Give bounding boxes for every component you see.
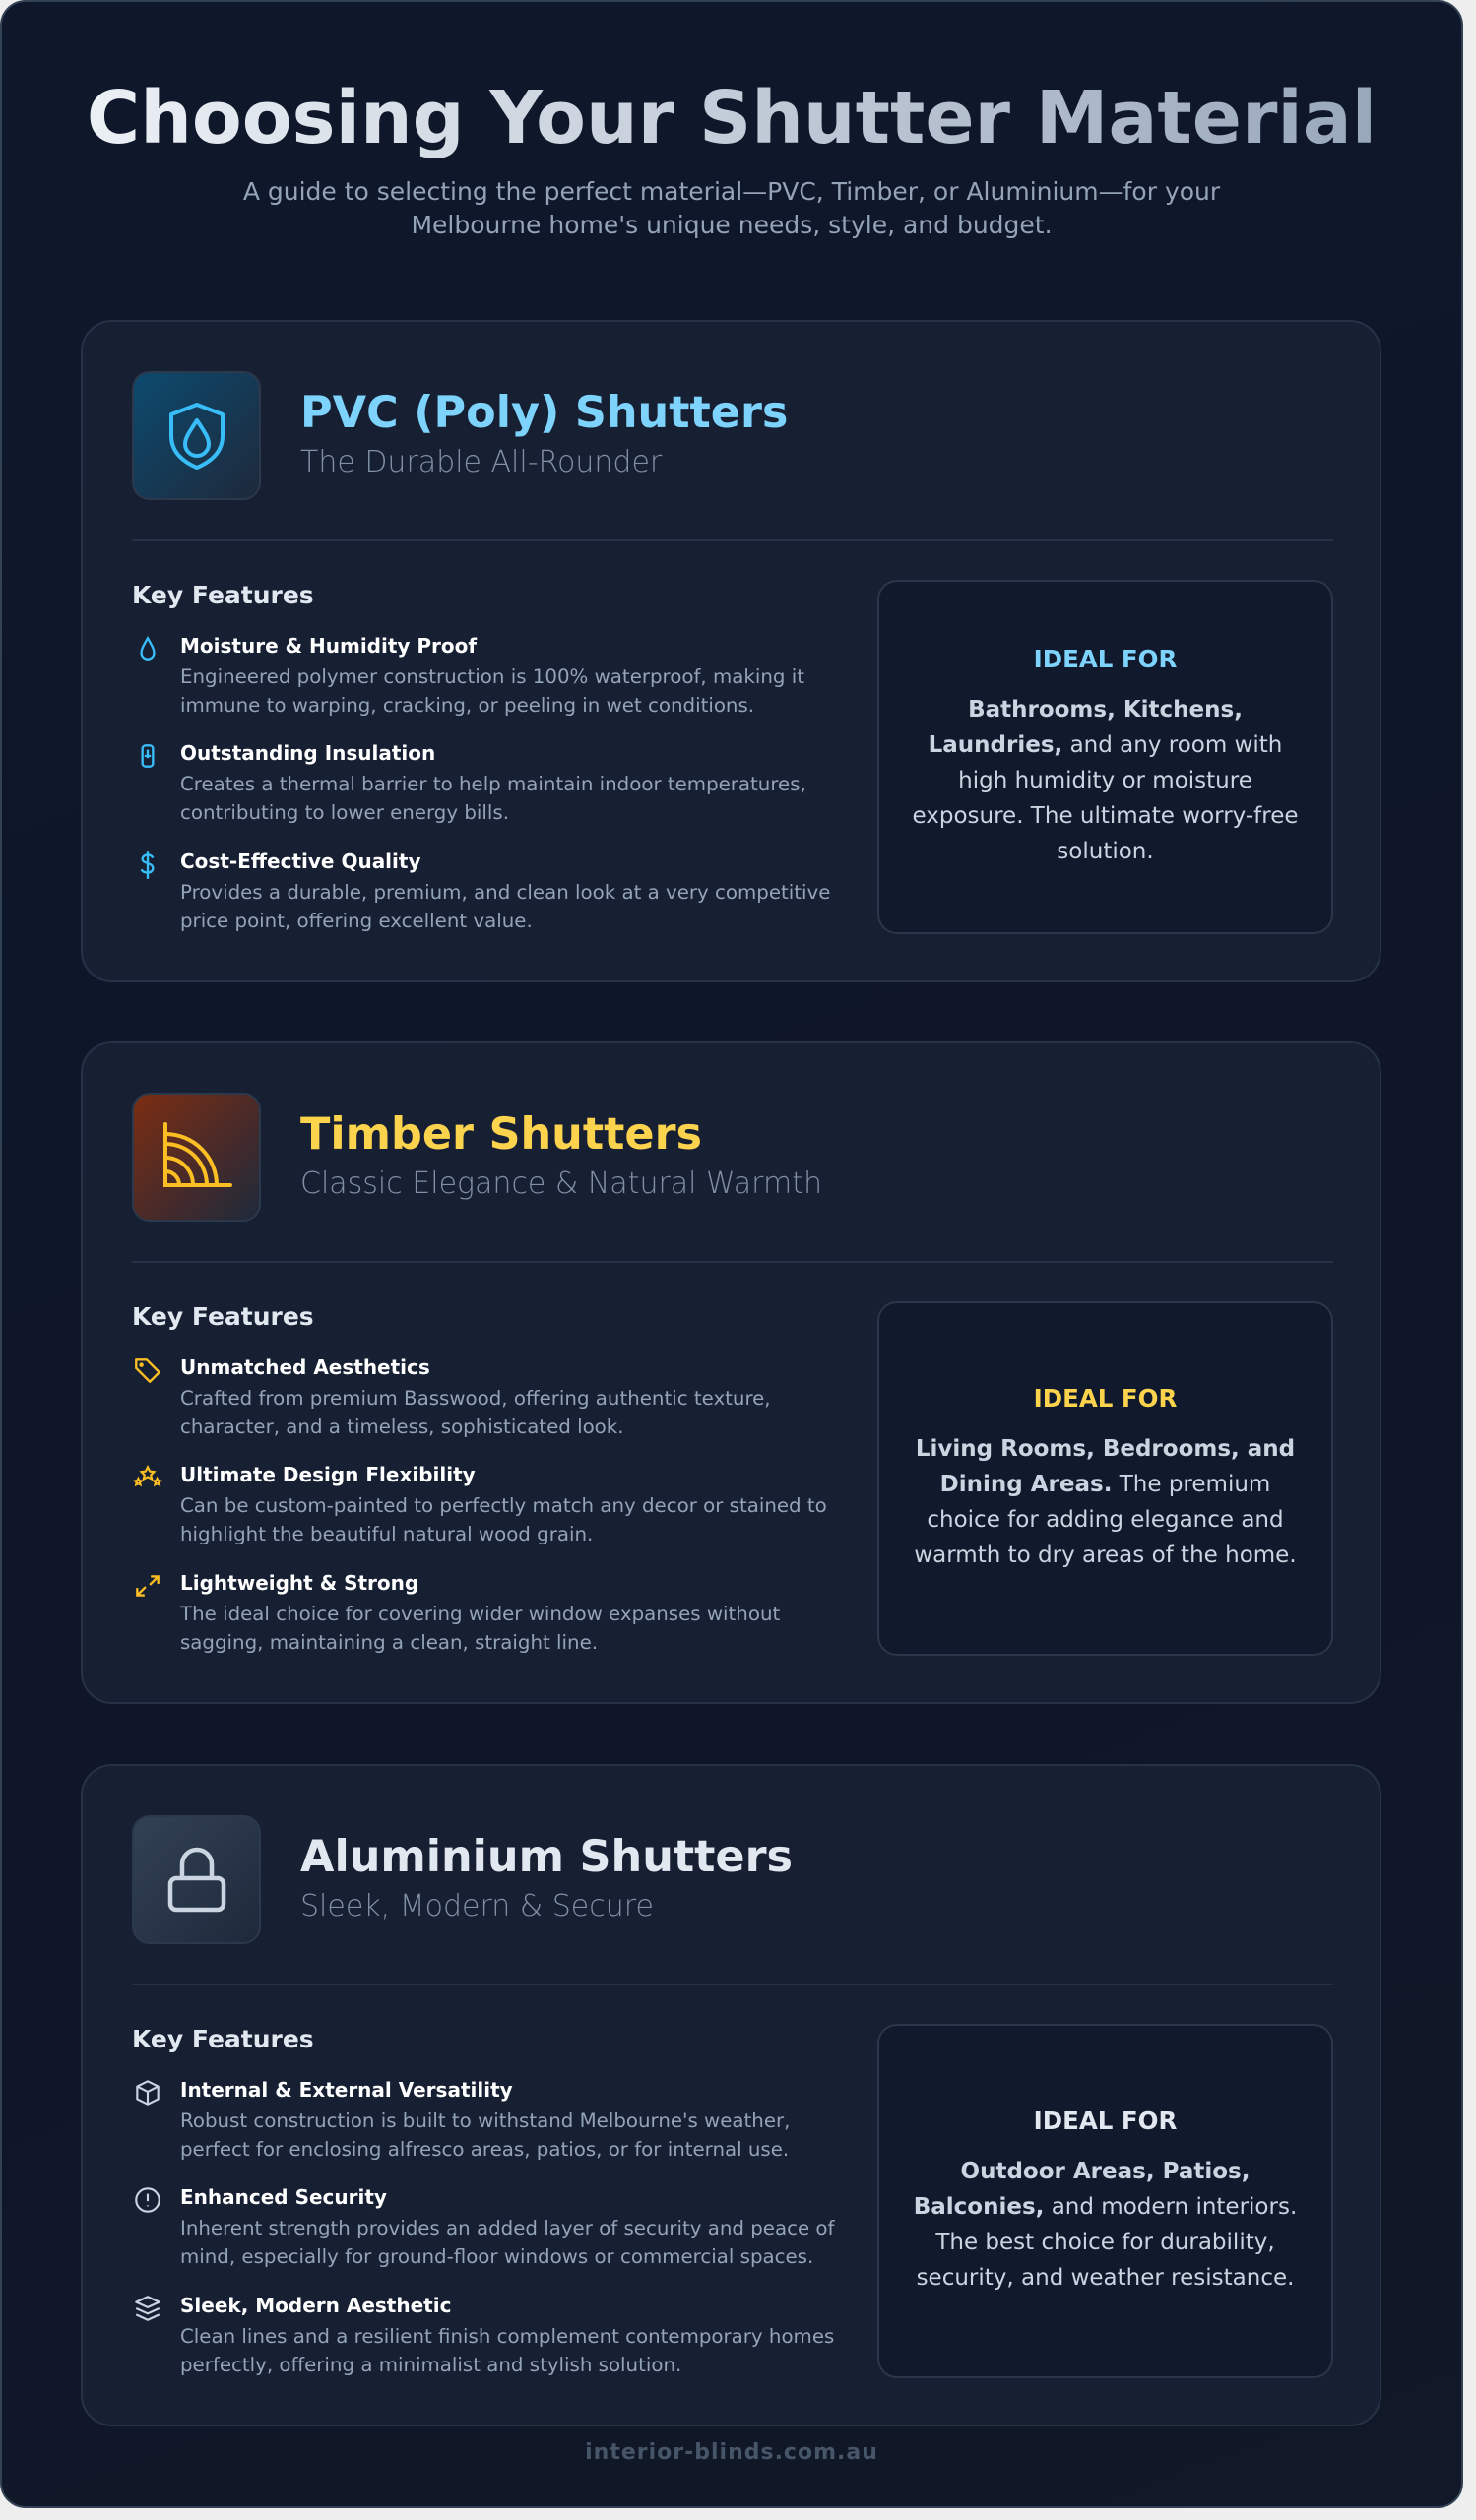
panel: Timber shutters: Lightweight & Strong	[180, 1571, 418, 1595]
ideal for box	[877, 2024, 1333, 2378]
panel: PVC shutters	[81, 320, 1381, 982]
subtitle: A guide to selecting the perfect material—PVC, Timber, or Aluminium—for your	[243, 177, 1220, 206]
panel: PVC shutters: Outstanding Insulation	[180, 741, 435, 765]
subheading: The Durable All-Rounder	[300, 445, 662, 479]
feature: versatility	[136, 2078, 790, 2161]
panel: Aluminium shutters: Clean lines and a resilient finish complement contemporary homes perfectly, offering a minimalist and stylish solution.	[180, 2325, 834, 2376]
panel: Aluminium shutters: Robust construction is built to withstand Melbourne's weather, perfect for enclosing alfresco areas, patios, or for internal use.	[180, 2110, 790, 2161]
key features heading: Key Features	[132, 2025, 314, 2053]
ideal for box	[877, 580, 1333, 934]
panel: Timber shutters: Ultimate Design Flexibility	[180, 1463, 476, 1486]
heading: PVC (Poly) Shutters	[300, 388, 788, 438]
panel: Timber shutters: The ideal choice for covering wider window expanses without sagging, maintaining a clean, straight line.	[180, 1603, 780, 1654]
subtitle	[243, 177, 1221, 239]
feature: security	[135, 2185, 835, 2268]
feature: aesthetic	[135, 2294, 834, 2376]
panel: Timber shutters: Can be custom-painted to perfectly match any decor or stained to highlight the beautiful natural wood grain.	[180, 1494, 827, 1545]
feature: lightweight	[136, 1571, 780, 1654]
key features heading: Key Features	[132, 581, 314, 609]
icon: timber rings	[132, 1093, 261, 1222]
panel: PVC shutters: Provides a durable, premium, and clean look at a very competitive price point, offering excellent value.	[180, 881, 830, 932]
panel: PVC shutters: Cost-Effective Quality	[180, 850, 421, 873]
panel: Aluminium shutters: Enhanced Security	[180, 2185, 387, 2209]
panel: Timber shutters: Crafted from premium Basswood, offering authentic texture, character, and a timeless, sophisticated look.	[180, 1387, 771, 1438]
panel: PVC shutters: Engineered polymer construction is 100% waterproof, making it immune to warping, cracking, or peeling in wet conditions.	[180, 665, 804, 717]
footer: interior-blinds.com.au	[585, 2440, 878, 2465]
subtitle: Melbourne home's unique needs, style, and budget.	[411, 211, 1053, 239]
feature: flexibility	[133, 1463, 827, 1545]
key features heading: Key Features	[132, 1302, 314, 1331]
panel: Aluminium shutters: Inherent strength provides an added layer of security and peace of mind, especially for ground-floor windows or commercial spaces.	[180, 2217, 835, 2268]
feature: aesthetics	[135, 1355, 771, 1438]
title: Choosing Your Shutter Material	[87, 76, 1377, 160]
ideal for box: Outdoor Areas, Patios, Balconies, and modern interiors. The best choice for durability, security, and weather resistance.	[914, 2159, 1297, 2291]
panel: Aluminium shutters: Internal & External Versatility	[180, 2078, 513, 2102]
ideal for box: IDEAL FOR	[1034, 645, 1177, 673]
panel: Aluminium shutters: Sleek, Modern Aesthetic	[180, 2294, 451, 2317]
subheading: Classic Elegance & Natural Warmth	[300, 1166, 822, 1201]
feature: moisture	[140, 634, 804, 717]
feature: insulation	[142, 741, 806, 824]
panel: Timber shutters	[81, 1041, 1381, 1704]
ideal for box: IDEAL FOR	[1034, 2107, 1177, 2135]
ideal for box: IDEAL FOR	[1034, 1384, 1177, 1413]
heading: Timber Shutters	[300, 1109, 702, 1160]
subheading: Sleek, Modern & Secure	[300, 1889, 654, 1923]
ideal for box: Living Rooms, Bedrooms, and Dining Areas. The premium choice for adding elegance and warmth to dry areas of the home.	[914, 1436, 1297, 1568]
panel: Aluminium shutters	[81, 1764, 1381, 2426]
panel: PVC shutters: Moisture & Humidity Proof	[180, 634, 477, 658]
panel: Timber shutters: Unmatched Aesthetics	[180, 1355, 430, 1379]
ideal for box: Bathrooms, Kitchens, Laundries, and any room with high humidity or moisture exposure. The ultimate worry-free solution.	[912, 697, 1298, 864]
icon: shield drop	[132, 371, 261, 500]
ideal for box	[877, 1301, 1333, 1656]
icon: padlock	[132, 1815, 261, 1944]
feature: cost	[140, 850, 830, 932]
panel: PVC shutters: Creates a thermal barrier to help maintain indoor temperatures, contributing to lower energy bills.	[180, 773, 806, 824]
heading: Aluminium Shutters	[300, 1832, 793, 1882]
